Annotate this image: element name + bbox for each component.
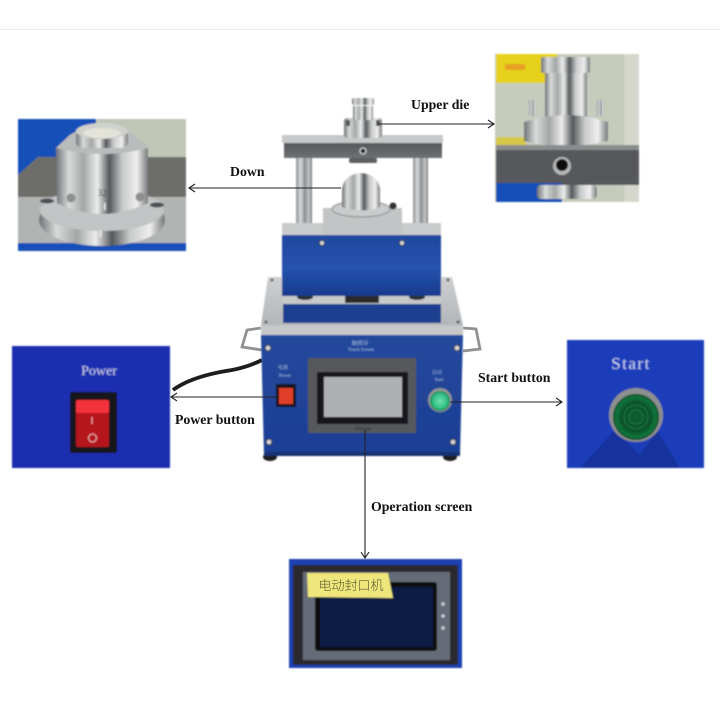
arrow: start button — [450, 398, 562, 406]
base front panel — [261, 335, 463, 456]
front panel small labels: 电源 — [278, 364, 289, 371]
photo: lower die detail — [18, 119, 186, 251]
arrow: down — [189, 184, 341, 192]
platform — [323, 208, 402, 234]
photo: power switch detail: Power — [81, 364, 117, 379]
body — [56, 128, 148, 214]
label: start button: Start button — [478, 370, 551, 385]
start button — [428, 388, 452, 412]
touch screen — [308, 358, 416, 433]
handles — [242, 328, 480, 351]
photo: start button detail — [567, 340, 704, 468]
front panel small labels: Touch Screen — [348, 348, 375, 353]
arrow: power button — [171, 393, 279, 401]
columns — [296, 156, 312, 228]
feet — [263, 453, 277, 461]
upper blue block — [282, 235, 441, 296]
front panel small labels: 触摸屏 — [352, 339, 369, 347]
base top plate — [261, 277, 463, 325]
label: down: Down — [230, 164, 265, 179]
photo: upper die detail — [495, 54, 639, 202]
front panel small labels: 启动 — [432, 369, 442, 376]
front panel small labels: Power — [279, 374, 292, 379]
base front lip — [261, 325, 463, 335]
top cross bar — [282, 135, 443, 143]
top divider — [0, 29, 720, 30]
cable — [173, 360, 262, 390]
front panel small labels — [278, 339, 444, 431]
arrow: upper die — [378, 120, 494, 128]
upper die — [344, 118, 382, 138]
lower die — [332, 201, 390, 217]
power switch — [276, 384, 296, 407]
front panel small labels: dfitemay — [355, 426, 372, 431]
photo: lower die detail: 32 — [98, 188, 106, 198]
flange — [39, 194, 165, 246]
photo: operation screen detail — [289, 559, 462, 668]
arrow: operation screen — [361, 430, 369, 558]
front panel small labels: Start — [434, 378, 444, 383]
upper block top — [282, 223, 441, 236]
machine — [173, 98, 480, 461]
photo: start button detail: Start — [611, 354, 651, 373]
photo: power switch detail — [12, 346, 170, 468]
label: upper die: Upper die — [411, 97, 469, 112]
label: power button: Power button — [175, 412, 255, 427]
sticky note handwriting: 电动封口机 — [318, 575, 384, 594]
label: operation screen: Operation screen — [371, 499, 473, 514]
